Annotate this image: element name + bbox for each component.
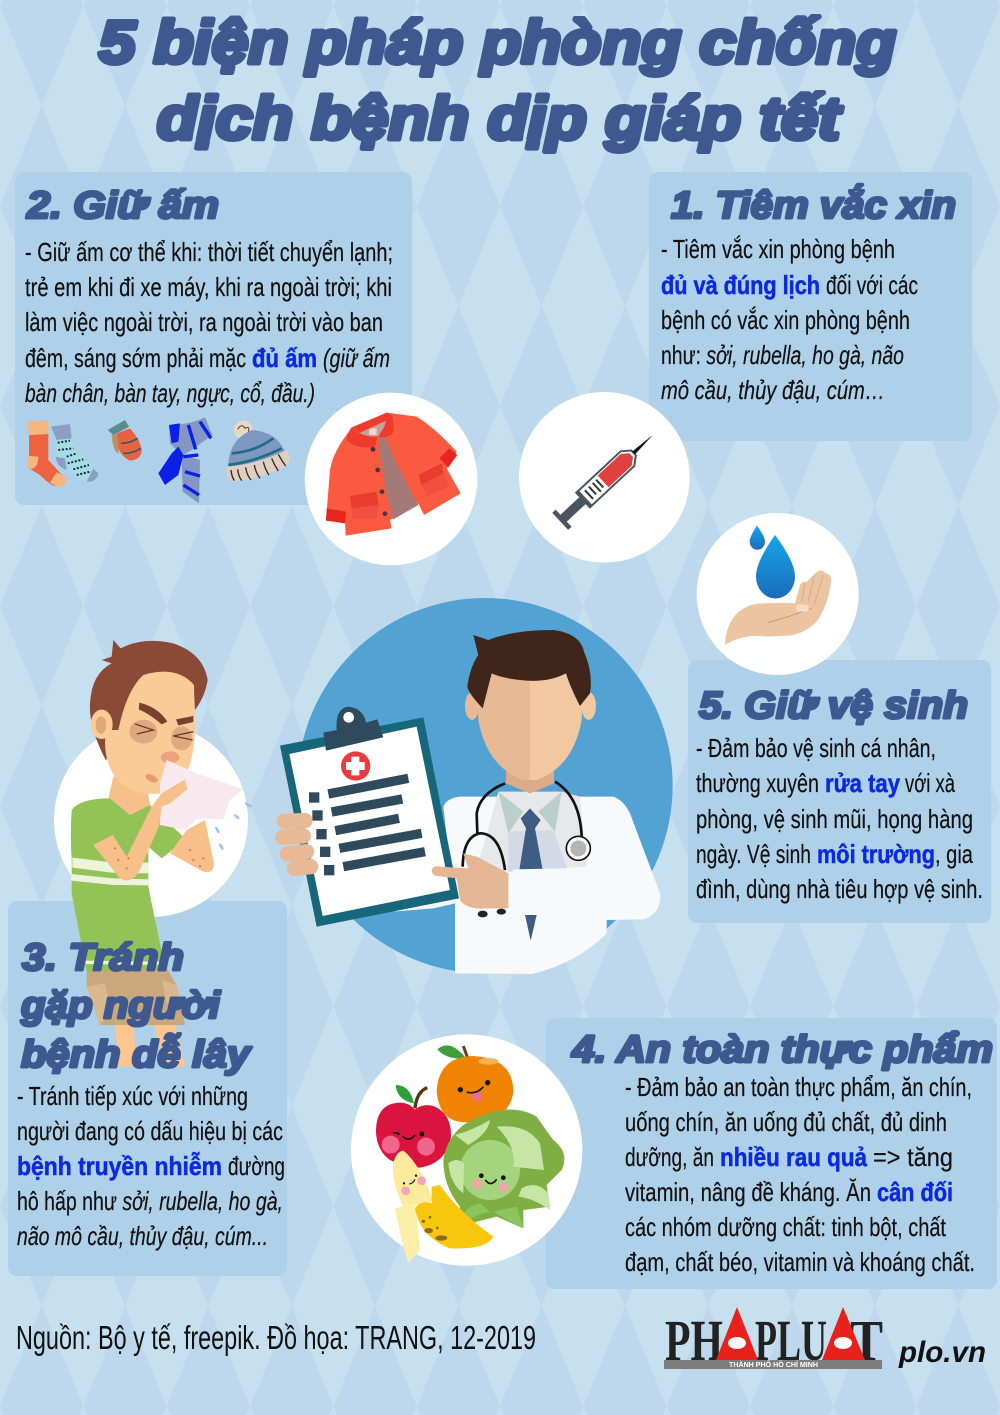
shorts	[87, 968, 185, 1025]
face	[478, 653, 582, 780]
neck	[506, 770, 554, 793]
panel: 4. food safety	[546, 1018, 997, 1289]
text block: giữ ấm: làm việc ngoài trời, ra ngoài trời vào ban	[25, 307, 383, 337]
text block: tiêm vắc xin	[661, 234, 918, 405]
text block: tránh gặp người bệnh: - Tránh tiếp xúc với những	[17, 1081, 248, 1111]
apple	[376, 1085, 451, 1168]
tissue	[160, 760, 243, 830]
winter accessories	[27, 417, 290, 503]
stethoscope	[463, 782, 590, 870]
checklist rows	[309, 778, 425, 875]
legs	[115, 1023, 185, 1067]
text block: an toàn thực phẩm	[625, 1072, 975, 1277]
icon: mitten	[108, 420, 142, 461]
text block: tiêm vắc xin: - Tiêm vắc xin phòng bệnh	[661, 234, 895, 264]
title: 5 biện pháp phòng chống	[99, 9, 896, 76]
text block: tránh gặp người bệnh: đường	[228, 1151, 285, 1181]
illustration: fruits and vegetables	[351, 1034, 582, 1266]
text block: giữ ấm: đêm, sáng sớm phải mặc	[25, 343, 246, 373]
text block: tiêm vắc xin: như: sởi, rubella, ho gà, não	[661, 340, 904, 370]
heading: tránh gặp người bệnh dễ lây: gặp người	[20, 985, 222, 1027]
heading: an toàn thực phẩm: 4. An toàn thực phẩm	[571, 1029, 993, 1071]
text block: giữ vệ sinh: thường xuyên	[696, 768, 819, 798]
title	[99, 9, 896, 152]
heading: tránh gặp người bệnh dễ lây: 3. Tránh	[22, 937, 184, 979]
icon: scarf	[158, 417, 212, 503]
logo: Pháp Luật	[664, 1307, 883, 1373]
hair	[467, 630, 591, 708]
logo subtitle: THÀNH PHỐ HỒ CHÍ MINH	[729, 1359, 818, 1369]
icon: white circle behind sneezing man	[54, 723, 248, 917]
text block: giữ ấm	[25, 237, 393, 408]
icon: jacket in white circle	[305, 393, 477, 565]
shirt	[71, 798, 186, 972]
clipboard	[280, 707, 459, 927]
text block: tránh gặp người bệnh	[17, 1081, 285, 1251]
panel: 3 background	[8, 901, 287, 1276]
logo red letters	[716, 1307, 865, 1360]
text block: tiêm vắc xin: đủ và đúng lịch	[661, 270, 820, 300]
source line: Nguồn: Bộ y tế, freepik. Đồ họa: TRANG, 12-2019	[16, 1319, 536, 1356]
face	[105, 672, 195, 794]
blue circle	[297, 598, 673, 973]
lab coat	[393, 797, 660, 974]
icon: orange sock	[27, 421, 67, 487]
text block: giữ ấm: (giữ ấm	[323, 343, 390, 373]
title: dịch bệnh dịp giáp tết	[157, 85, 843, 152]
sleeve	[508, 833, 660, 919]
text block: giữ vệ sinh: , gia	[935, 839, 973, 869]
logo wordmark: T	[850, 1308, 883, 1373]
text block: giữ vệ sinh: môi trường	[817, 839, 935, 869]
text block: an toàn thực phẩm: cân đối	[877, 1177, 953, 1207]
tie	[519, 808, 543, 941]
icon: knit hat	[226, 421, 290, 482]
icon: syringe in white circle	[519, 392, 690, 563]
text block: tiêm vắc xin: bệnh có vắc xin phòng bệnh	[661, 305, 910, 335]
text block: tránh gặp người bệnh: hô hấp như sởi, rubella, ho gà,	[17, 1186, 283, 1216]
left arm and hand	[93, 779, 187, 880]
panel: 5. hygiene	[688, 660, 991, 923]
website: plo.vn	[898, 1336, 986, 1369]
logo wordmark	[665, 1308, 883, 1373]
illustration: doctor holding clipboard	[280, 598, 673, 974]
text block: an toàn thực phẩm: vitamin, nâng đề kháng. Ăn	[625, 1177, 871, 1207]
right arm	[170, 820, 214, 872]
lettuce	[443, 1110, 564, 1228]
hair	[90, 640, 208, 761]
illustration: sneezing man	[71, 640, 252, 1067]
neck	[108, 777, 150, 817]
text block: an toàn thực phẩm: nhiều rau quả	[720, 1142, 867, 1172]
heading: giữ ấm: 2. Giữ ấm	[26, 185, 219, 227]
heading: tiêm vắc xin: 1. Tiêm vắc xin	[671, 183, 956, 227]
text block: giữ vệ sinh: với xà	[905, 768, 955, 798]
heading: tránh gặp người bệnh dễ lây: bệnh dễ lây	[21, 1032, 252, 1076]
text block: giữ ấm: bàn chân, bàn tay, ngực, cổ, đầu.)	[25, 378, 315, 408]
icon: blue sock	[51, 424, 98, 482]
holding fingers	[283, 821, 311, 868]
orange	[437, 1045, 513, 1122]
heading: giữ vệ sinh: 5. Giữ vệ sinh	[699, 685, 968, 727]
text block: giữ ấm: trẻ em khi đi xe máy, khi ra ngoài trời; khi	[25, 272, 392, 302]
text block: tiêm vắc xin: mô cầu, thủy đậu, cúm…	[661, 375, 885, 405]
text block: giữ vệ sinh	[696, 733, 983, 904]
banana	[393, 1151, 493, 1263]
text block: giữ ấm: đủ ấm	[252, 343, 317, 373]
text block: giữ vệ sinh: ngày. Vệ sinh	[696, 839, 811, 869]
ear	[91, 710, 113, 739]
text block: tiêm vắc xin: đối với các	[826, 270, 918, 300]
lapels and shirt	[473, 792, 587, 873]
logo wordmark: PH	[665, 1308, 723, 1373]
icon: hand with water drops	[697, 513, 859, 675]
pointing hand	[432, 853, 508, 909]
text block: giữ ấm: - Giữ ấm cơ thể khi: thời tiết chuyển lạnh;	[25, 237, 393, 267]
panel: 1. vaccination	[649, 172, 972, 441]
clip	[323, 707, 383, 751]
text block: an toàn thực phẩm: => tăng	[873, 1142, 953, 1172]
red cross badge	[341, 751, 370, 781]
logo wordmark: PLU	[755, 1308, 827, 1373]
text block: giữ vệ sinh: rửa tay	[825, 768, 900, 798]
heading: tránh gặp người bệnh dễ lây	[20, 937, 252, 1076]
text block: tránh gặp người bệnh: người đang có dấu hiệu bị các	[17, 1116, 283, 1146]
panel: 2. keep warm	[15, 172, 412, 505]
text block: an toàn thực phẩm: dưỡng, ăn	[625, 1142, 714, 1172]
text block: tránh gặp người bệnh: não mô cầu, thủy đậu, cúm...	[17, 1221, 268, 1251]
text block: tránh gặp người bệnh: bệnh truyền nhiễm	[17, 1151, 222, 1181]
ears	[465, 692, 596, 720]
